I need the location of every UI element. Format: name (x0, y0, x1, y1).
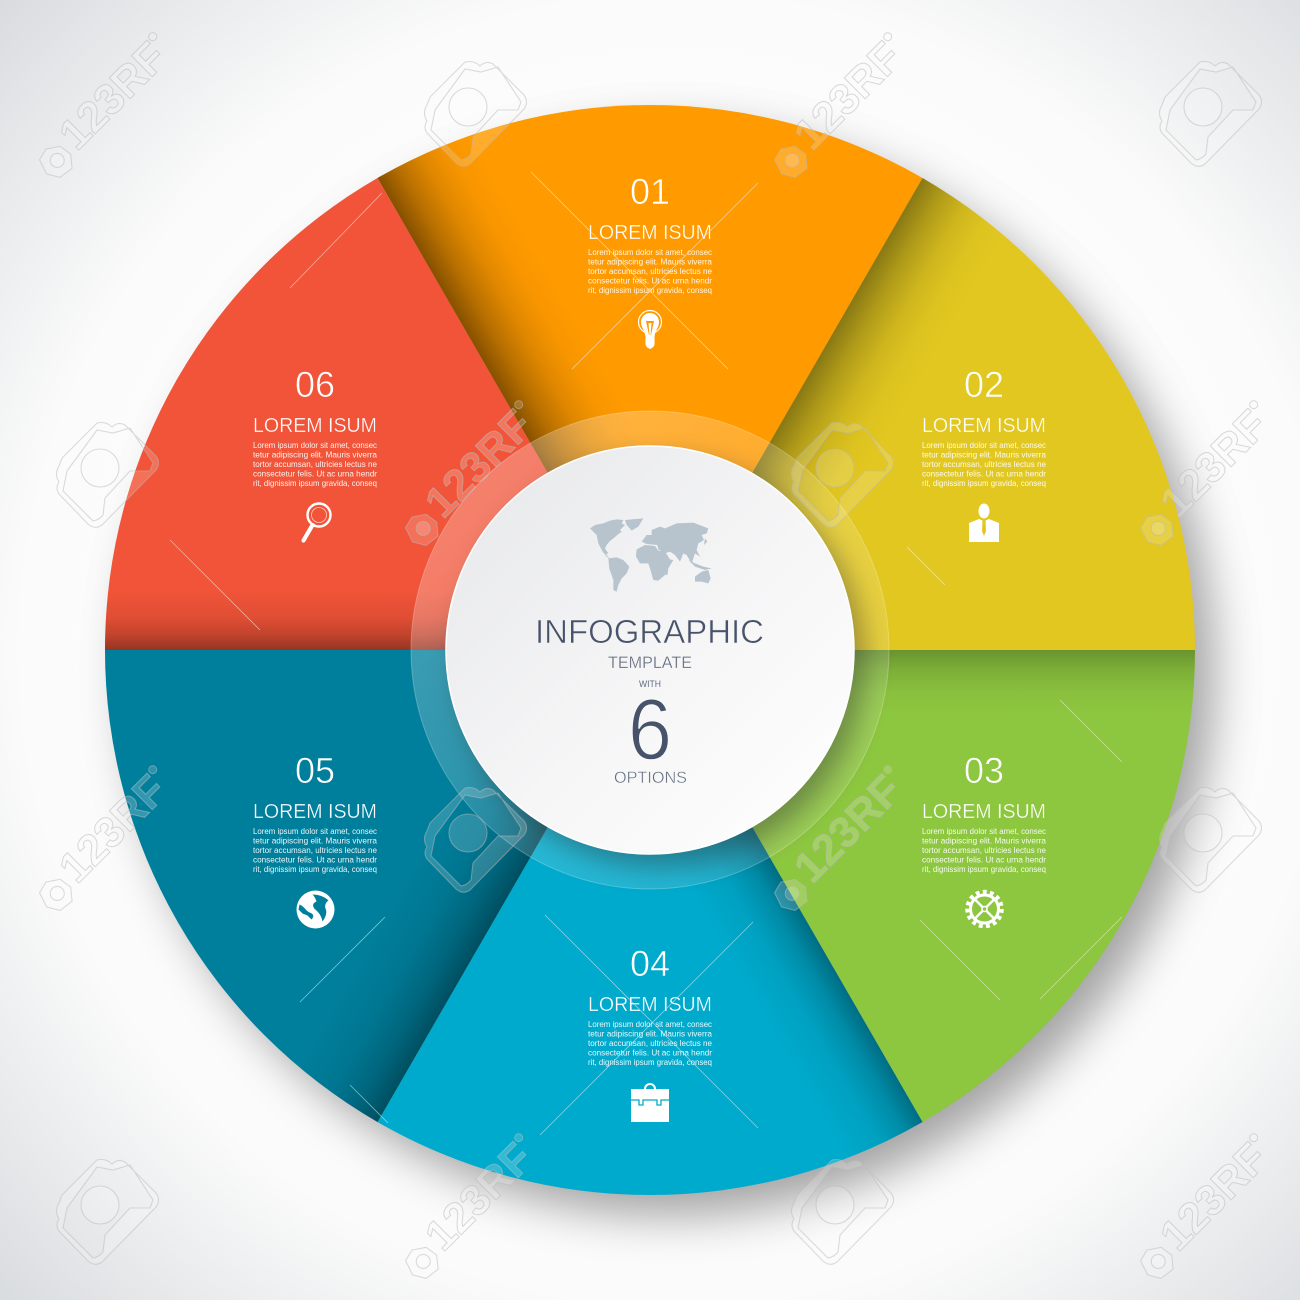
body text 03 (922, 826, 1047, 874)
body text 05: consectetur felis. Ut ac urna hendr (253, 854, 377, 864)
body text 05: Lorem ipsum dolor sit amet, consec (253, 826, 378, 836)
body text 04 (588, 1019, 713, 1067)
body text 01: rit, dignissim ipsum gravida, conseq (588, 285, 712, 295)
heading 03: LOREM ISUM (922, 801, 1046, 823)
body text 05: tetur adipiscing elit. Mauris viverra (253, 836, 377, 846)
watermark logos: 123RF (416, 1134, 542, 1260)
heading 04: LOREM ISUM (588, 994, 712, 1016)
drop shadow of main wheel (129, 131, 1213, 1215)
watermark logos: 123RF (50, 33, 176, 159)
block 03 (922, 750, 1047, 926)
body text 04: Lorem ipsum dolor sit amet, consec (588, 1019, 713, 1029)
wheel of six segments (105, 105, 1195, 1195)
body text 06: consectetur felis. Ut ac urna hendr (253, 468, 377, 478)
body text 03: tetur adipiscing elit. Mauris viverra (922, 836, 1046, 846)
big number 6: 6 (628, 682, 672, 778)
body text 04: tortor accumsan, ultricies lectus ne (588, 1038, 712, 1048)
body text 06: tortor accumsan, ultricies lectus ne (253, 459, 377, 469)
body text 02: tortor accumsan, ultricies lectus ne (922, 459, 1046, 469)
body text 01: tortor accumsan, ultricies lectus ne (588, 266, 712, 276)
body text 01 (588, 247, 713, 295)
body text 05: tortor accumsan, ultricies lectus ne (253, 845, 377, 855)
body text 02 (922, 440, 1047, 488)
body text 04: consectetur felis. Ut ac urna hendr (588, 1048, 712, 1058)
title: INFOGRAPHIC: INFOGRAPHIC (535, 613, 764, 650)
watermark logos: 123RF (785, 766, 911, 892)
body text 03: rit, dignissim ipsum gravida, conseq (922, 864, 1046, 874)
body text 03: consectetur felis. Ut ac urna hendr (922, 854, 1046, 864)
body text 03: tortor accumsan, ultricies lectus ne (922, 845, 1046, 855)
body text 06: Lorem ipsum dolor sit amet, consec (253, 440, 378, 450)
heading 01: LOREM ISUM (588, 222, 712, 244)
number 05: 05 (295, 750, 335, 791)
number 06: 06 (295, 364, 335, 405)
translucent glass ring (411, 411, 889, 889)
body text 06: rit, dignissim ipsum gravida, conseq (253, 478, 377, 488)
watermark logos: 123RF (416, 401, 542, 527)
segment 05: teal (105, 650, 650, 1122)
number 03: 03 (964, 750, 1004, 791)
world map (590, 518, 712, 592)
watermark logos: 123RF (1151, 401, 1277, 527)
centre shadow on wheel (455, 457, 865, 867)
icon: magnifier (304, 504, 330, 540)
block 06 (253, 364, 378, 540)
segment 02: yellow (650, 178, 1195, 650)
body text 01: Lorem ipsum dolor sit amet, consec (588, 247, 713, 257)
icon: globe (296, 890, 334, 928)
number 02: 02 (964, 364, 1004, 405)
segment 03: green (650, 650, 1195, 1122)
watermark logos: 123RF (50, 766, 176, 892)
heading 02: LOREM ISUM (922, 415, 1046, 437)
label: WITH: WITH (639, 679, 661, 690)
body text 03: Lorem ipsum dolor sit amet, consec (922, 826, 1047, 836)
body text 06: tetur adipiscing elit. Mauris viverra (253, 450, 377, 460)
icon: businessman (969, 504, 999, 542)
watermark logos: 123RF (785, 33, 911, 159)
body text 06 (253, 440, 378, 488)
icon: light bulb (638, 310, 662, 349)
heading 06: LOREM ISUM (253, 415, 377, 437)
number 01: 01 (630, 171, 670, 212)
body text 02: tetur adipiscing elit. Mauris viverra (922, 450, 1046, 460)
icon: briefcase (631, 1084, 669, 1122)
watermark logos: 123RF (1151, 1134, 1277, 1260)
segment 06: red (105, 178, 650, 650)
body text 04: tetur adipiscing elit. Mauris viverra (588, 1028, 712, 1038)
block 05 (253, 750, 378, 928)
body text 05: rit, dignissim ipsum gravida, conseq (253, 864, 377, 874)
block 04 (588, 943, 713, 1122)
heading 05: LOREM ISUM (253, 801, 377, 823)
subtitle: TEMPLATE: TEMPLATE (608, 653, 692, 672)
block 01 (588, 171, 713, 349)
body text 04: rit, dignissim ipsum gravida, conseq (588, 1057, 712, 1067)
body text 01: consectetur felis. Ut ac urna hendr (588, 276, 712, 286)
body text 05 (253, 826, 378, 874)
block 02 (922, 364, 1047, 542)
body text 02: consectetur felis. Ut ac urna hendr (922, 468, 1046, 478)
centre disc (446, 446, 854, 854)
number 04: 04 (630, 943, 670, 984)
body text 02: Lorem ipsum dolor sit amet, consec (922, 440, 1047, 450)
body text 02: rit, dignissim ipsum gravida, conseq (922, 478, 1046, 488)
label: OPTIONS: OPTIONS (614, 768, 687, 787)
segment 01: orange (378, 105, 922, 650)
segment 04: blue (378, 650, 922, 1195)
icon: gear (968, 892, 1002, 926)
body text 01: tetur adipiscing elit. Mauris viverra (588, 256, 712, 266)
